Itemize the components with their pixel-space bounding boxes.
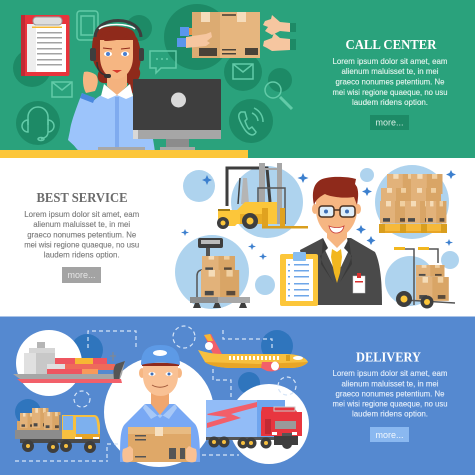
dashed route lines [15,326,296,461]
text block: delivery: laudem ridens option. [352,408,428,418]
text block: delivery: mei wisi regione quaeque, no usu [332,398,448,408]
button: call center more: more... [375,118,404,128]
text block: best service: graeco nonumes petentium. Ne [27,230,137,240]
desk [0,150,248,158]
illustration: man in suit with glasses [300,177,382,305]
heading: delivery: DELIVERY [356,350,421,366]
icon: chat dots [156,58,168,60]
text block: best service [24,209,140,260]
text block: best service: laudem ridens option. [44,250,120,260]
illustration: airplane [198,334,308,371]
illustration: computer monitor [98,79,221,151]
text block: delivery [332,368,448,418]
button: delivery more: more... [375,430,404,440]
icon: red clipboard [21,15,70,76]
text block: call center: alienum maluisset te, in mei [342,66,439,76]
button: call center more [370,115,409,130]
illustration: hand truck [394,247,455,308]
illustration: semi truck [206,400,302,449]
button: best service more [62,267,101,283]
heading: call center: CALL CENTER [346,38,437,53]
text block: best service: alienum maluisset te, in mei [33,219,130,229]
text block: call center [332,56,448,107]
background circles [13,4,292,145]
background circles [15,330,293,425]
illustration: cargo ship [13,342,125,383]
text block: call center: laudem ridens option. [352,97,428,107]
illustration: delivery truck [15,408,100,453]
text block: best service: Lorem ipsum dolor sit amet, eam [24,209,139,219]
panel: call center [0,0,475,158]
illustration: call center operator [68,20,155,152]
text block: call center: mei wisi regione quaeque, no usu [332,87,448,97]
button: delivery more [370,427,409,442]
text block: delivery: alienum maluisset te, in mei [342,378,439,388]
text block: delivery: Lorem ipsum dolor sit amet, eam [332,368,448,378]
panel: best service [0,158,475,317]
illustration: stacked boxes on pallet [379,174,447,233]
panel: delivery [0,316,475,475]
sparkles [181,170,456,260]
text block: call center: Lorem ipsum dolor sit amet, eam [332,56,448,66]
outline icons [22,11,292,140]
illustration: clipboard with checklist [280,252,318,306]
illustration: courier with parcel [120,345,200,462]
illustration: parcel scale [190,238,250,308]
heading: best service: BEST SERVICE [36,191,128,206]
background circles [175,165,459,309]
text block: delivery: graeco nonumes petentium. Ne [336,388,445,398]
illustration: parcel with hands [177,12,296,58]
button: best service more: more... [67,270,96,280]
text block: best service: mei wisi regione quaeque, no usu [24,240,140,250]
text block: call center: graeco nonumes petentium. Ne [336,76,445,86]
illustration: forklift [217,163,308,229]
